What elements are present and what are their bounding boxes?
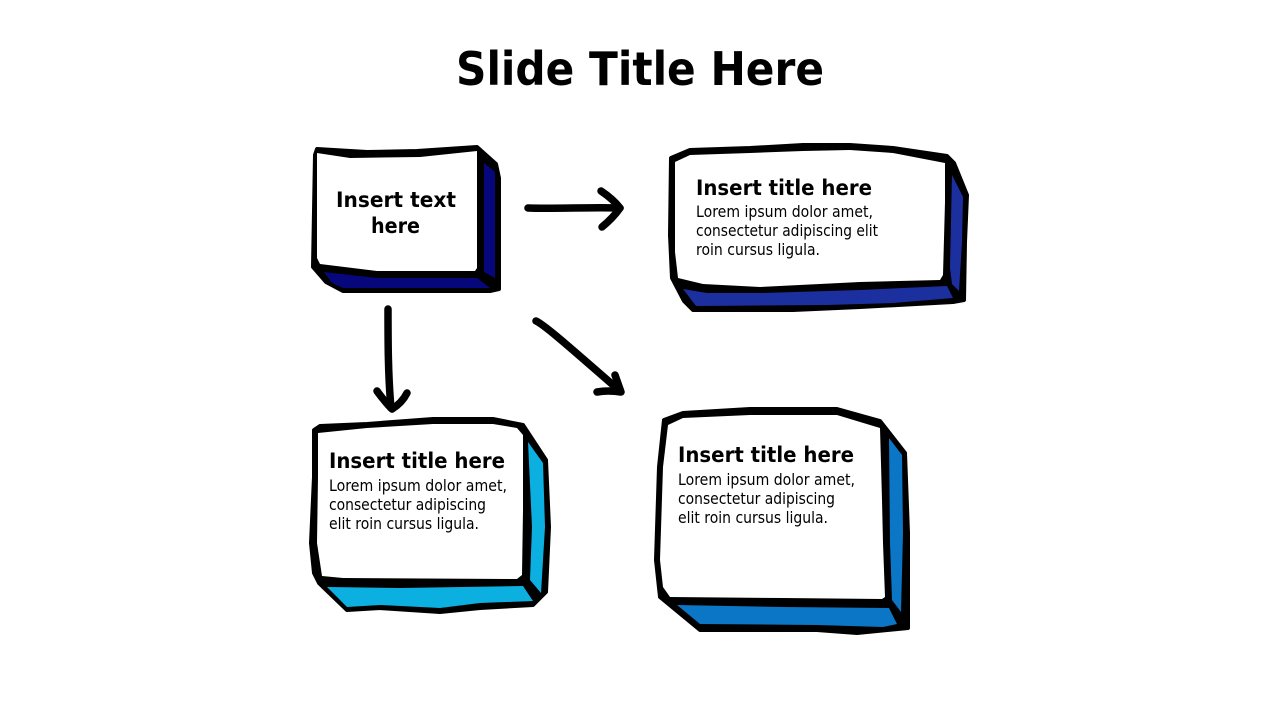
box text: [336, 188, 456, 238]
box text: [696, 176, 878, 259]
title: Slide Title Here: [456, 42, 824, 96]
bottom face: [677, 605, 897, 627]
panel: bottom-right blue box: [656, 409, 908, 633]
right face: [889, 438, 903, 612]
box text: [329, 449, 507, 533]
panel: top-left navy box: [313, 147, 499, 291]
front face: [675, 150, 945, 287]
box text: elit roin cursus ligula.: [329, 514, 479, 533]
front face: [317, 151, 477, 271]
panel: bottom-left cyan box: [311, 419, 549, 612]
box outline: [313, 147, 499, 291]
box text: Insert title here: [329, 449, 505, 473]
box outline: [656, 409, 908, 633]
panel: top-right royal blue box: [670, 145, 967, 310]
box text: Insert text: [336, 188, 456, 212]
box text: here: [371, 214, 420, 238]
bottom face: [324, 272, 490, 288]
right face: [950, 175, 963, 291]
box text: Insert title here: [696, 176, 872, 200]
front face: [317, 424, 523, 579]
box text: elit roin cursus ligula.: [678, 508, 828, 527]
right face: [484, 163, 495, 278]
box outline: [670, 145, 967, 310]
arrow: down: [377, 309, 407, 409]
right face: [528, 442, 545, 593]
bottom face: [683, 286, 953, 306]
box text: [678, 443, 855, 527]
box text: Lorem ipsum dolor amet,: [329, 476, 507, 495]
bottom face: [327, 586, 533, 608]
box text: Lorem ipsum dolor amet,: [678, 470, 855, 489]
box text: Lorem ipsum dolor amet,: [696, 202, 873, 221]
arrow: right: [528, 191, 620, 227]
box outline: [311, 419, 549, 612]
box text: consectetur adipiscing elit: [696, 221, 878, 240]
front face: [660, 415, 885, 599]
box text: consectetur adipiscing: [678, 489, 835, 508]
box text: Insert title here: [678, 443, 854, 467]
box text: roin cursus ligula.: [696, 240, 820, 259]
arrow: diagonal: [536, 321, 621, 392]
box text: consectetur adipiscing: [329, 495, 486, 514]
